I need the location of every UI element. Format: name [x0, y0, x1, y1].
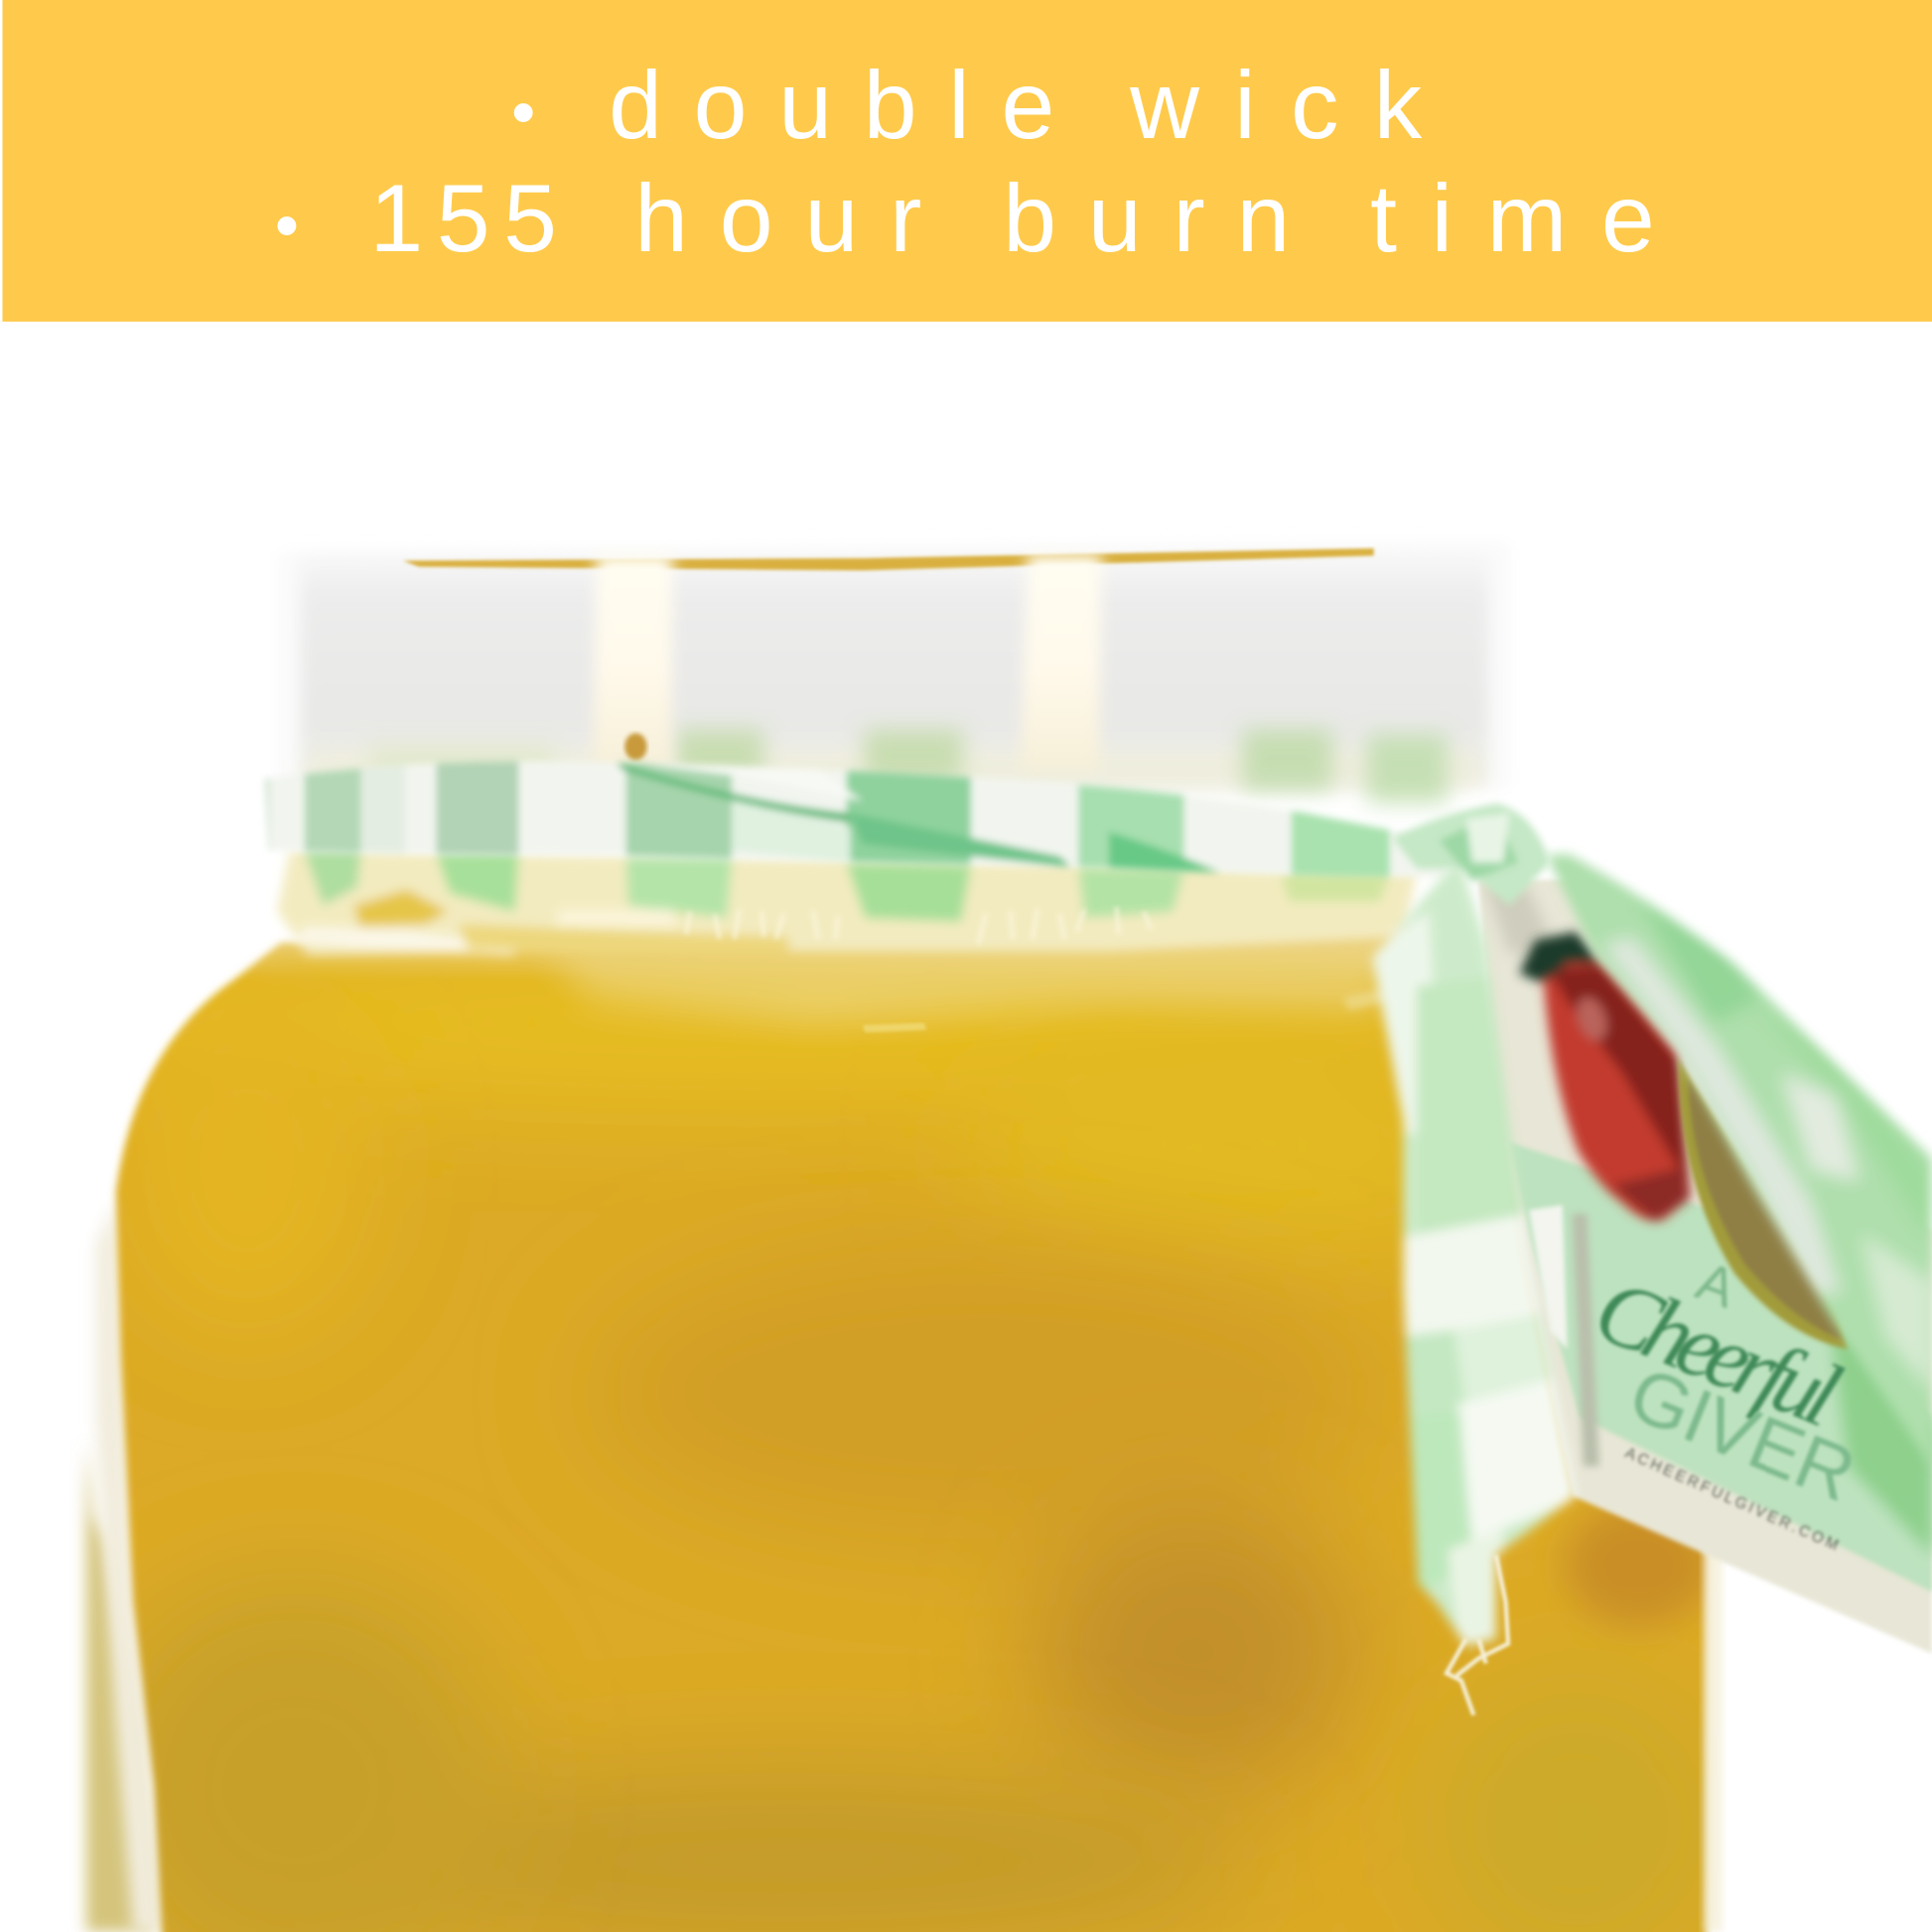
- tag cream paper: [1478, 880, 1932, 1654]
- tag grey shadow strip: [1573, 1213, 1599, 1466]
- right ribbon tail: [1547, 848, 1932, 1457]
- yellow wedge: [353, 890, 449, 926]
- line 2: 155 hour burn time: [275, 164, 1655, 272]
- tag red fruit: [1519, 931, 1691, 1221]
- tag glossy tape: [1529, 1205, 1568, 1349]
- tag grey shade near knot: [1483, 883, 1555, 955]
- tag website: ACHEERFULGIVER.COM: [1622, 1445, 1841, 1555]
- frayed fabric under band: [277, 850, 1417, 955]
- tag green panel: [1509, 1142, 1932, 1591]
- tag text: brand: [1582, 1251, 1866, 1555]
- jar neck glass: [278, 542, 1511, 801]
- white fabric patch: [554, 909, 678, 926]
- glass streak on left: [96, 1201, 163, 1932]
- wax body: [25, 911, 1725, 1932]
- tag citrus slice: [1678, 1057, 1849, 1349]
- fraying threads: [686, 906, 1151, 944]
- line 2: 155 hour burn time: 155: [369, 164, 557, 272]
- line 2: 155 hour burn time: hour: [634, 164, 921, 272]
- line 2: 155 hour burn time: •: [275, 187, 299, 264]
- line 1: double wick: wick: [1129, 51, 1423, 159]
- ribbon frayed end: [1447, 1555, 1508, 1716]
- line 2: 155 hour burn time: burn: [1003, 164, 1290, 272]
- left ribbon tail: [1366, 866, 1581, 1718]
- right flame: [1021, 554, 1102, 770]
- line 1: double wick: double: [609, 51, 1054, 159]
- photo: candle jar: [25, 542, 1932, 1932]
- left flame: [593, 554, 673, 770]
- tag script word: Cheerful: [1582, 1258, 1855, 1447]
- outer pale jar band: [86, 1442, 154, 1932]
- white strip at wax edge: [296, 926, 514, 955]
- blurred green reflection under neck: [308, 730, 1478, 803]
- tag letter A: A: [1689, 1251, 1744, 1320]
- hang tag card: [1478, 880, 1932, 1654]
- tag saturated green edge: [1829, 1307, 1932, 1555]
- line 1: double wick: [511, 51, 1423, 159]
- ribbon knot: [1392, 803, 1550, 905]
- yellow wax rim line: [403, 548, 1374, 571]
- top banner: [2, 0, 1932, 322]
- jar glass highlights: [863, 986, 1723, 1932]
- wick: [624, 733, 647, 760]
- tag word GIVER: GIVER: [1617, 1351, 1866, 1518]
- line 1: double wick: •: [511, 73, 535, 151]
- line 2: 155 hour burn time: time: [1370, 164, 1655, 272]
- banner background: [2, 0, 1932, 322]
- gingham ribbon band: [262, 759, 1442, 881]
